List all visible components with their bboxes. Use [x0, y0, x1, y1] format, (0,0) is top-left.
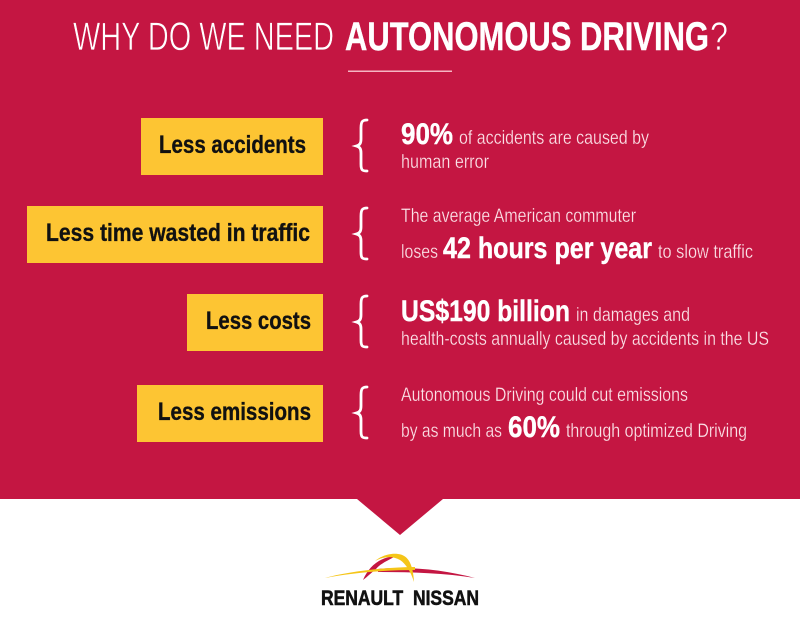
brace icon — [356, 296, 367, 347]
brace icon — [356, 387, 367, 438]
fact: 190 billion: in damages and — [576, 305, 690, 326]
label box: less emissions — [137, 385, 323, 442]
label box: less accidents: Less accidents — [159, 131, 306, 159]
fact: 60 percent — [401, 385, 747, 444]
fact: 90 percent: human error — [401, 152, 490, 173]
label box: less time wasted — [27, 206, 323, 263]
fact: 42 hours: 42 hours per year — [443, 232, 652, 265]
label box: less accidents — [141, 118, 323, 175]
title — [73, 15, 728, 59]
fact: 60 percent: Autonomous Driving could cut emissions — [401, 385, 688, 406]
fact: 90 percent: 90% — [401, 118, 453, 151]
title: ? — [710, 15, 728, 59]
fact: 60 percent: 60% — [508, 411, 560, 444]
brace icon — [356, 120, 367, 171]
row: less emissions — [137, 385, 747, 444]
brace icon — [356, 208, 367, 259]
fact: 190 billion — [401, 295, 769, 350]
label box: less time wasted: Less time wasted in traffic — [46, 219, 310, 247]
logo icon: arcs — [325, 554, 475, 582]
logo: Renault Nissan — [321, 554, 479, 610]
title underline — [348, 70, 452, 72]
fact: 42 hours — [401, 206, 753, 265]
label box: less costs — [187, 294, 323, 351]
label box: less emissions: Less emissions — [158, 398, 311, 426]
logo wordmark: RENAULT NISSAN — [321, 587, 479, 610]
fact: 190 billion: US$190 billion — [401, 295, 570, 328]
fact: 42 hours: The average American commuter — [401, 206, 637, 227]
fact: 60 percent: by as much as — [401, 421, 502, 442]
fact: 60 percent: through optimized Driving — [566, 421, 747, 442]
row: less accidents — [141, 118, 649, 175]
title: WHY DO WE NEED — [73, 15, 334, 59]
fact: 90 percent: of accidents are caused by — [459, 128, 649, 149]
label box: less costs: Less costs — [206, 307, 311, 335]
fact: 90 percent — [401, 118, 649, 173]
row: less time wasted in traffic — [27, 206, 753, 265]
fact: 42 hours: to slow traffic — [658, 242, 753, 263]
row: less costs — [187, 294, 769, 351]
fact: 42 hours: loses — [401, 242, 438, 263]
